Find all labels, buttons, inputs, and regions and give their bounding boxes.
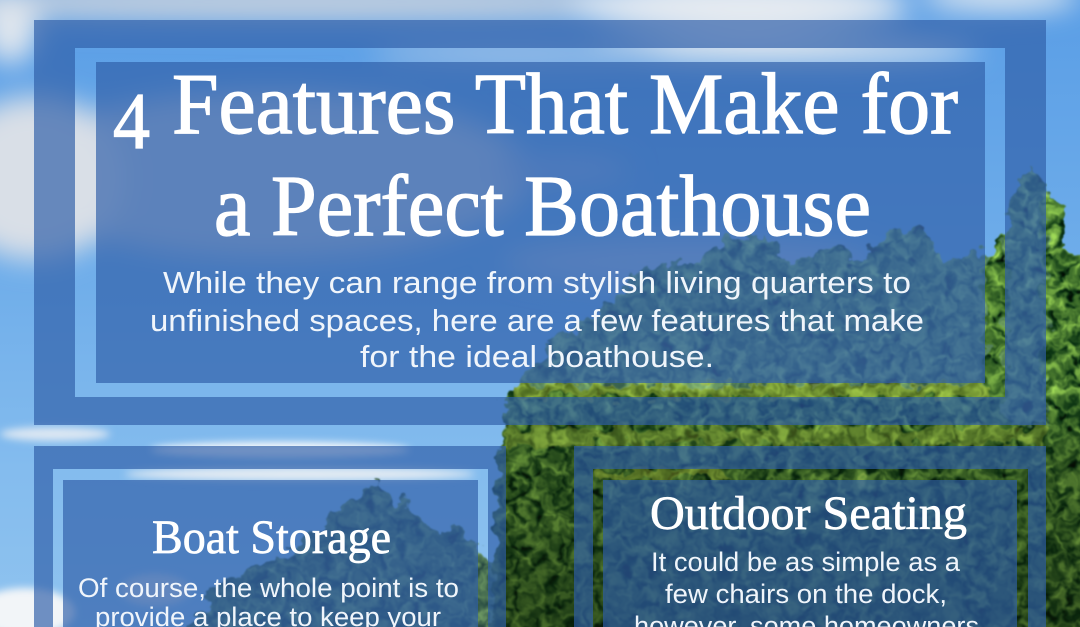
title: Features That Make for [172,55,958,152]
outdoor seating text: few chairs on the dock, [665,579,947,609]
intro text: While they can range from stylish living quarters to [163,265,911,300]
heading: boat storage: Boat Storage [152,511,391,564]
heading: outdoor seating: Outdoor Seating [650,487,967,540]
header double frame [34,20,1046,425]
intro text: unfinished spaces, here are a few features that make [150,303,924,338]
title: 4 [113,78,150,166]
outdoor seating text: It could be as simple as a [651,547,961,577]
intro text [150,265,924,374]
intro text: for the ideal boathouse. [360,339,714,374]
boat storage text: Of course, the whole point is to [78,573,459,603]
boat storage frame [34,446,506,627]
panel: boat storage [34,446,506,627]
title [113,55,958,254]
title: a Perfect Boathouse [214,157,871,254]
outdoor seating text [634,547,979,627]
panel: header [34,20,1046,425]
boat storage text [78,573,459,627]
outdoor seating frame [574,446,1046,627]
panel: outdoor seating [574,446,1046,627]
